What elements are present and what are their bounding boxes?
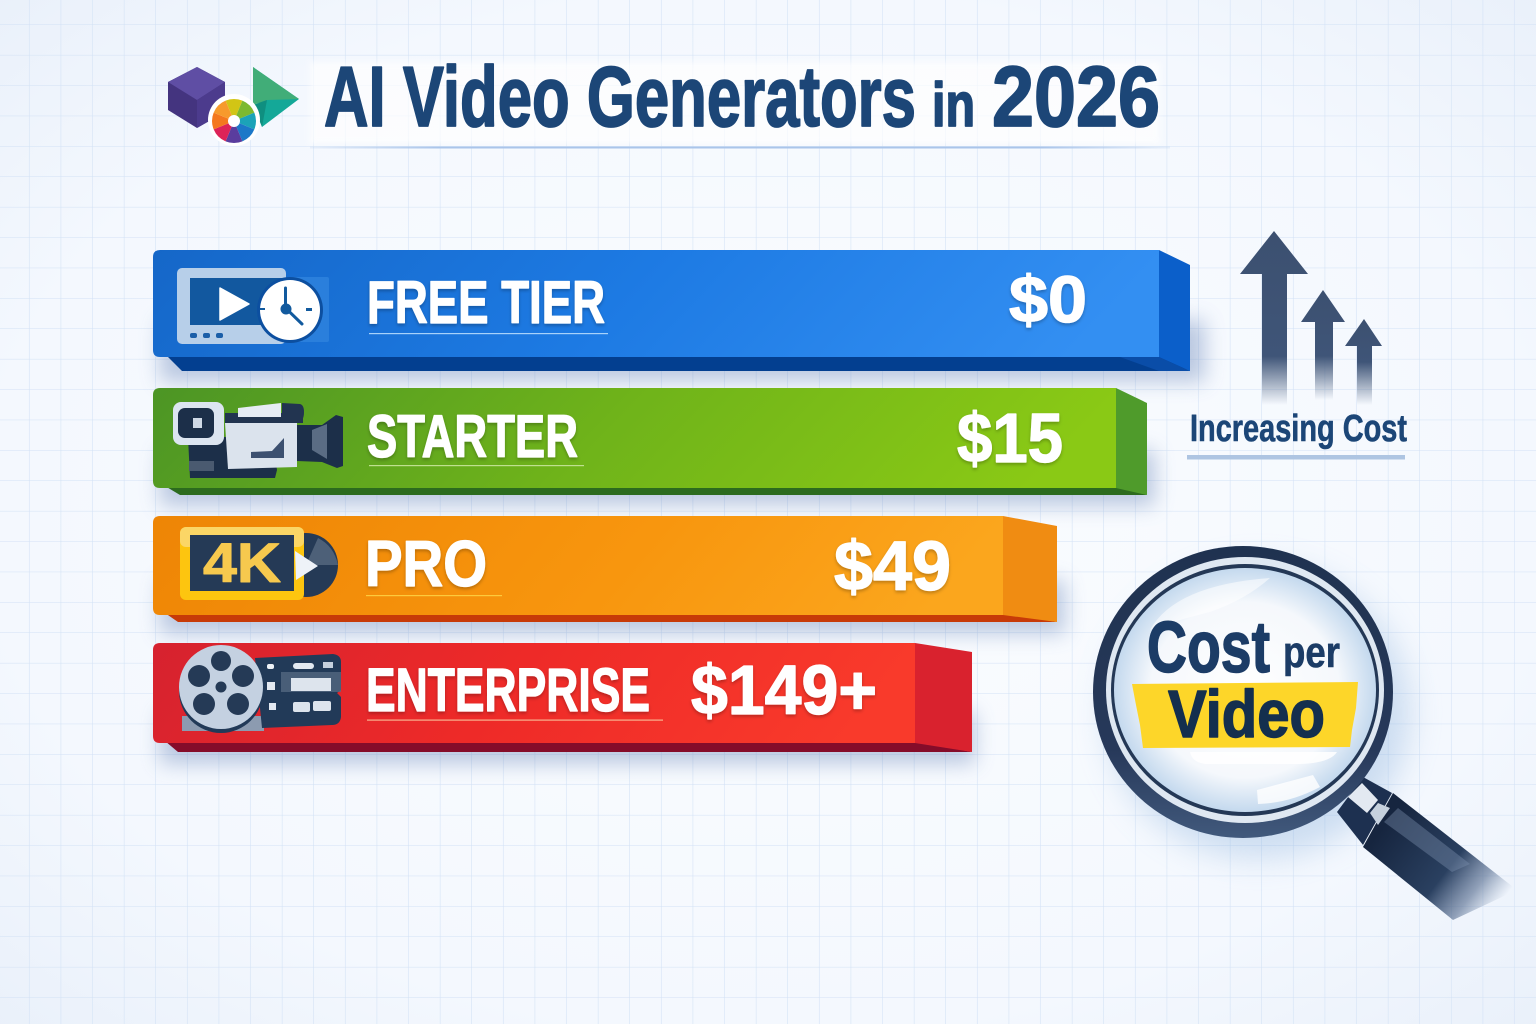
icon: logo cube, color wheel and play	[168, 67, 299, 146]
label: enterprise: ENTERPRISE	[366, 656, 650, 724]
label: increasing cost: Increasing Cost	[1190, 408, 1407, 450]
icon: video player with clock	[177, 268, 329, 344]
icon: video camera	[173, 402, 343, 478]
title: AI Video Generators	[324, 50, 916, 145]
price: starter: $15	[957, 399, 1063, 477]
panel: pro bar	[153, 516, 1057, 622]
price: pro: $49	[834, 527, 951, 605]
label: free tier: FREE TIER	[367, 269, 605, 336]
text: cost per video	[1147, 608, 1340, 752]
handle	[1337, 777, 1517, 920]
icon: film reel and clapper	[179, 645, 341, 733]
label: increasing cost	[1187, 408, 1407, 460]
label: pro: PRO	[365, 527, 487, 600]
title: in	[932, 71, 975, 140]
icon: 4K badge with play disc	[180, 527, 338, 600]
magnifying glass	[1093, 546, 1517, 920]
panel: free tier bar	[153, 250, 1190, 371]
title band	[310, 62, 1160, 144]
text: cost per video: Video	[1168, 677, 1325, 752]
highlighter: yellow brush	[1132, 682, 1358, 748]
icon: increasing arrows	[1240, 231, 1382, 405]
text: cost per video: Cost	[1147, 608, 1270, 688]
lens rim	[1093, 546, 1393, 838]
price: enterprise: $149+	[691, 651, 877, 729]
title: 2026	[992, 50, 1160, 145]
lens highlight	[1150, 578, 1270, 630]
label: starter: STARTER	[367, 403, 578, 470]
title underline	[310, 146, 1170, 148]
icon: 4K badge with play disc: 4K	[203, 531, 281, 594]
text: cost per video: per	[1283, 628, 1340, 677]
panel: enterprise bar	[153, 643, 972, 752]
price: free tier: $0	[1009, 262, 1087, 336]
bar shadows	[160, 320, 1205, 764]
panel: starter bar	[153, 388, 1147, 495]
